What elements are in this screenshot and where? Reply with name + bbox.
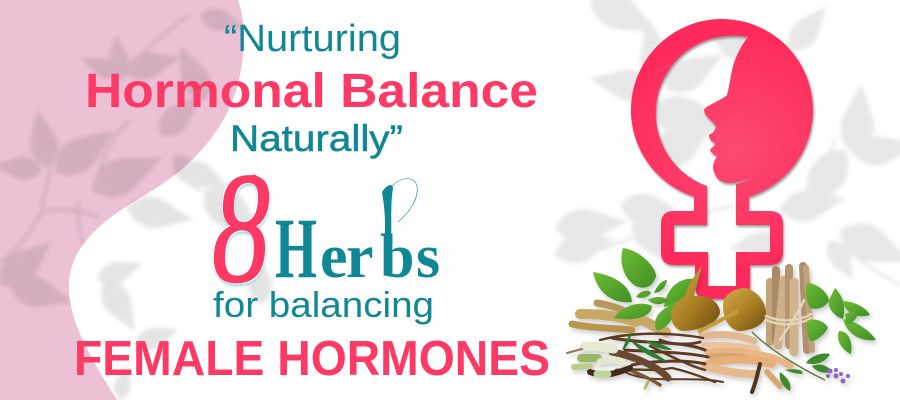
word: Herbs — [275, 178, 440, 296]
herb: pale roots — [572, 303, 666, 332]
herb: left green leaves — [593, 248, 694, 331]
numeral 8: 8 — [212, 141, 270, 316]
word: Herbs: H — [275, 200, 317, 296]
herb: sprig with purple flowers — [752, 332, 825, 380]
icon: female symbol with face profile — [631, 19, 813, 299]
herb: tied stick bundle — [766, 266, 812, 352]
quote line 1: “Nurturing — [224, 18, 401, 60]
illustration: herb pile — [567, 248, 876, 392]
heading: FEMALE HORMONES: FEMALE HORMONES — [74, 332, 550, 386]
pink wave panel — [0, 0, 244, 400]
herb: pale stems — [567, 346, 648, 388]
herb: right green leaves — [806, 283, 876, 354]
leaf shadows: left cluster — [0, 5, 276, 400]
word: Herbs: erbs — [320, 223, 440, 291]
herb: peach roots — [702, 335, 790, 386]
heading: Hormonal Balance: Hormonal Balance — [85, 65, 538, 118]
quote line 3: Naturally” — [230, 118, 403, 159]
herb: green blades — [622, 332, 672, 362]
herb: maca tubers — [671, 265, 720, 331]
herb: dark tangled roots — [590, 334, 760, 392]
subheading: for balancing: for balancing — [213, 284, 434, 325]
leaf shadows: right cluster — [551, 0, 900, 286]
